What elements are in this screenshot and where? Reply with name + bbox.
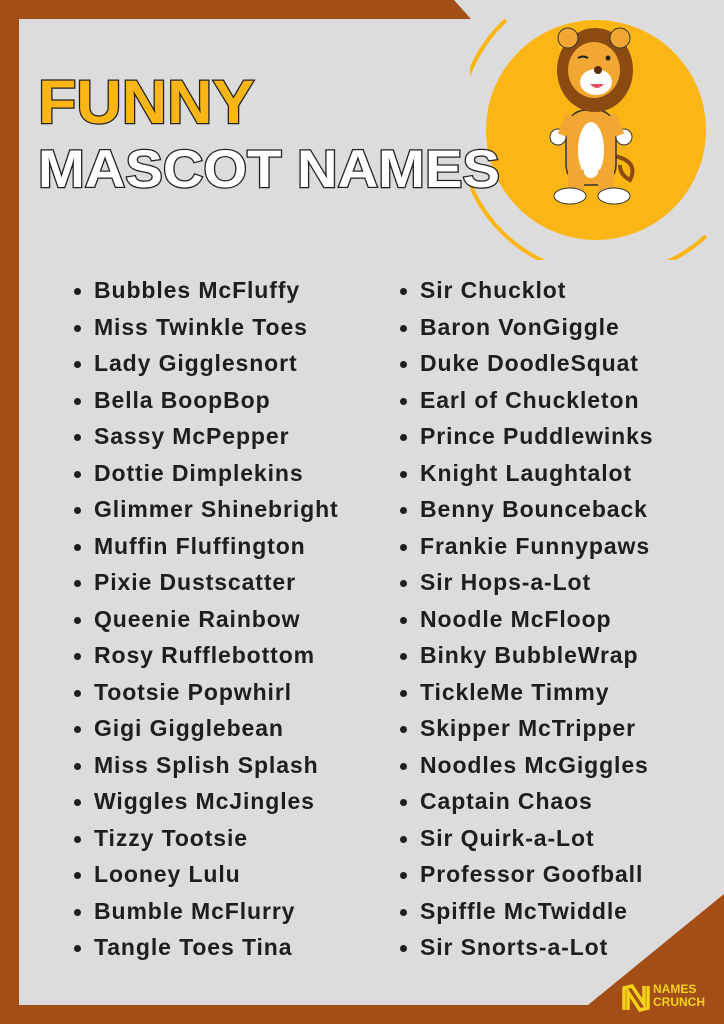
list: right column: Skipper McTripper bbox=[420, 715, 636, 741]
list: right column: Sir Chucklot bbox=[420, 277, 566, 303]
list: right column bbox=[400, 277, 654, 960]
logo: names crunch bbox=[622, 982, 705, 1012]
list: right column: Sir Quirk-a-Lot bbox=[420, 824, 595, 850]
list: right column: Sir Snorts-a-Lot bbox=[420, 934, 608, 960]
list: left column: Tangle Toes Tina bbox=[94, 934, 292, 960]
title: MASCOT NAMES bbox=[38, 140, 500, 199]
circle with lion bbox=[470, 18, 708, 260]
list: right column: Sir Hops-a-Lot bbox=[420, 569, 591, 595]
list: left column: Tootsie Popwhirl bbox=[94, 678, 292, 704]
list: left column: Tizzy Tootsie bbox=[94, 824, 248, 850]
title: FUNNY bbox=[38, 68, 254, 136]
list: left column: Bella BoopBop bbox=[94, 386, 271, 412]
list: left column: Miss Twinkle Toes bbox=[94, 314, 308, 340]
list: left column: Dottie Dimplekins bbox=[94, 460, 304, 486]
list: right column: Captain Chaos bbox=[420, 788, 593, 814]
list: right column: Duke DoodleSquat bbox=[420, 350, 639, 376]
title bbox=[38, 68, 500, 199]
list: left column: Looney Lulu bbox=[94, 861, 241, 887]
list: right column: TickleMe Timmy bbox=[420, 678, 609, 704]
list: right column: Professor Goofball bbox=[420, 861, 643, 887]
logo: names crunch: NAMES bbox=[653, 982, 696, 996]
list: left column: Muffin Fluffington bbox=[94, 532, 306, 558]
list: right column: Noodles McGiggles bbox=[420, 752, 649, 778]
list: left column: Rosy Rufflebottom bbox=[94, 642, 315, 668]
list: right column: Noodle McFloop bbox=[420, 606, 611, 632]
list: right column: Baron VonGiggle bbox=[420, 314, 620, 340]
list: left column: Lady Gigglesnort bbox=[94, 350, 298, 376]
list: left column: Queenie Rainbow bbox=[94, 606, 300, 632]
list: right column: Spiffle McTwiddle bbox=[420, 898, 628, 924]
list: left column: Sassy McPepper bbox=[94, 423, 289, 449]
list: left column: Wiggles McJingles bbox=[94, 788, 315, 814]
list: right column: Knight Laughtalot bbox=[420, 460, 632, 486]
list: left column: Miss Splish Splash bbox=[94, 752, 319, 778]
list: left column: Bubbles McFluffy bbox=[94, 277, 300, 303]
list: right column: Earl of Chuckleton bbox=[420, 386, 639, 412]
icon: lion mascot bbox=[550, 28, 633, 204]
list: right column: Binky BubbleWrap bbox=[420, 642, 638, 668]
list: right column: Prince Puddlewinks bbox=[420, 423, 654, 449]
list: left column: Gigi Gigglebean bbox=[94, 715, 284, 741]
list: left column bbox=[74, 277, 339, 960]
list: right column: Frankie Funnypaws bbox=[420, 532, 650, 558]
logo: names crunch: CRUNCH bbox=[653, 995, 705, 1009]
list: left column: Bumble McFlurry bbox=[94, 898, 295, 924]
list: left column: Glimmer Shinebright bbox=[94, 496, 339, 522]
list: left column: Pixie Dustscatter bbox=[94, 569, 296, 595]
list: right column: Benny Bounceback bbox=[420, 496, 648, 522]
